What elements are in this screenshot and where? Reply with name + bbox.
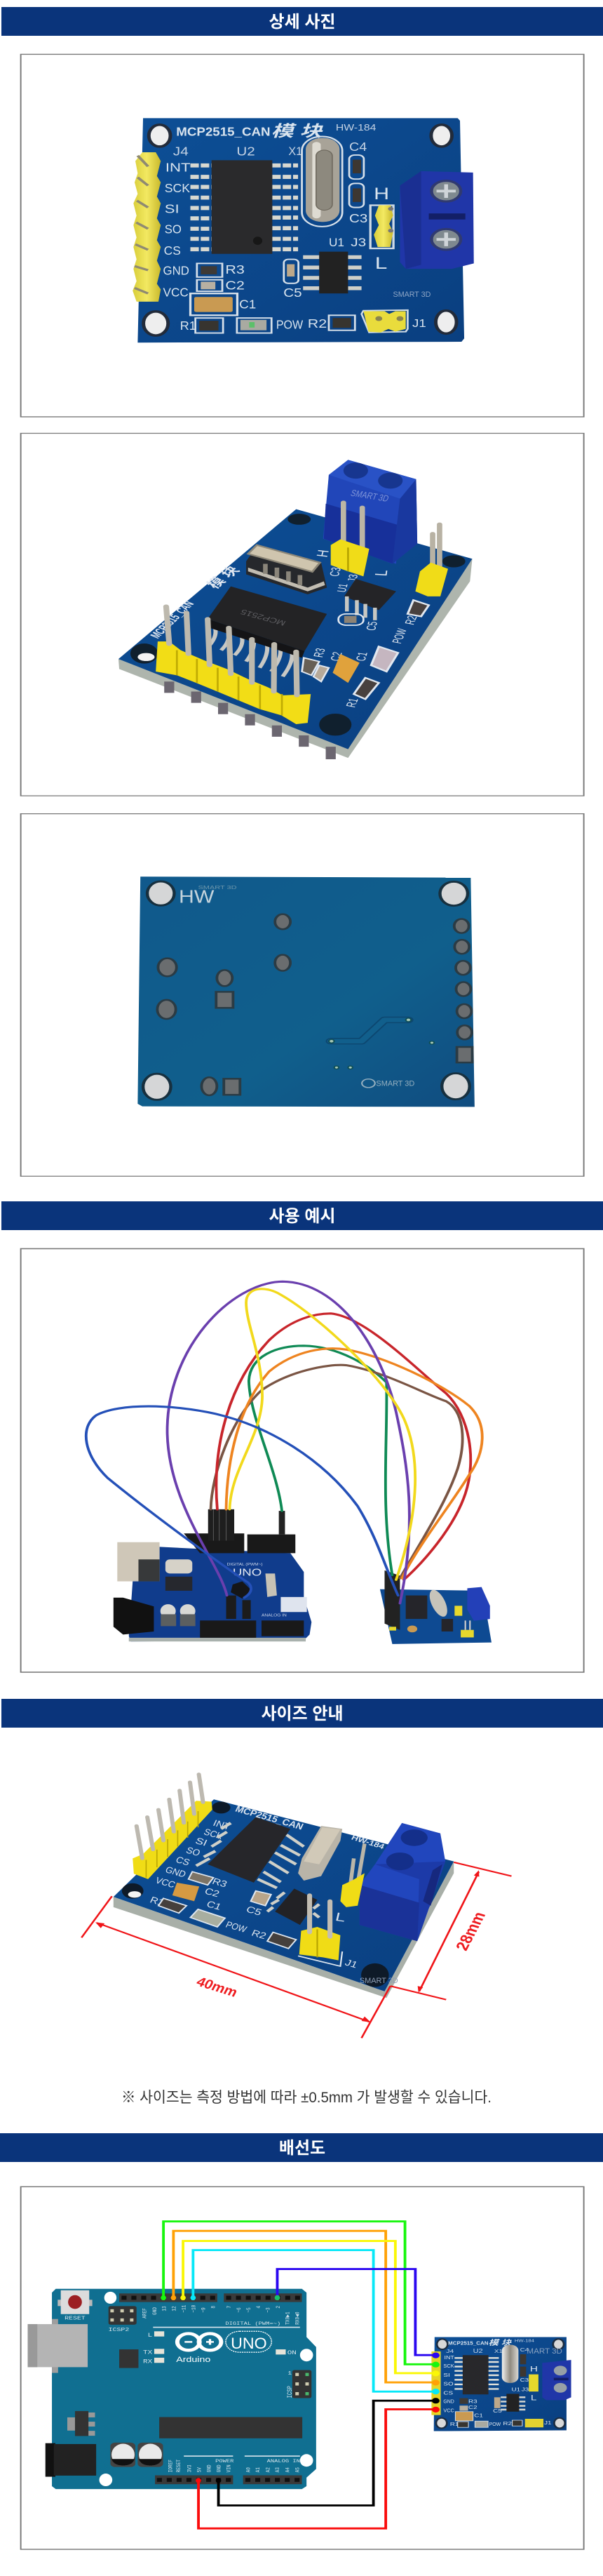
module silkscreen labels: MCP2515_CAN: [176, 126, 271, 138]
MCP2515 module image: MART 3D: [527, 2347, 562, 2355]
mounting holes: [130, 514, 466, 735]
angled silkscreen labels: R1: [148, 1895, 165, 1908]
circuit board top: [137, 118, 464, 342]
MCP2515 module image: GND: [443, 2398, 454, 2404]
HW and logo silkscreen: HW: [179, 887, 215, 907]
jumper J3 with pins: [331, 502, 370, 576]
solder joints: [157, 914, 473, 1095]
blue terminal: [360, 1823, 445, 1941]
module silkscreen labels: C5: [283, 286, 302, 300]
MCP2515 module image: CS: [443, 2390, 453, 2396]
power and analog labels: RESET: [177, 2459, 183, 2472]
pins under the board: [169, 681, 331, 759]
power and analog labels: VIN: [226, 2464, 233, 2472]
MCP2515 module image: C4: [520, 2347, 529, 2353]
crystal X1: [302, 137, 342, 227]
status LEDs: L: [148, 2332, 152, 2339]
jumper J1: [362, 310, 407, 333]
heading: 사용 예시: [1, 1201, 603, 1230]
digital pin labels: 12: [172, 2306, 178, 2311]
angled silkscreen labels: L: [334, 1910, 347, 1925]
angled silkscreen labels: R3: [210, 1876, 229, 1890]
jumper J1: [298, 1895, 342, 1966]
MCP2515 module image: [431, 2337, 571, 2431]
heading: 배선도: [0, 2133, 603, 2162]
MCP2515 module image: R1: [450, 2421, 459, 2427]
module silkscreen labels: R1: [180, 319, 196, 333]
yellow pin header J4: [133, 152, 161, 302]
Arduino UNO board photo: UNO: [233, 1566, 262, 1578]
status LEDs: TX: [143, 2349, 152, 2356]
angled silkscreen labels: SCK: [202, 1827, 224, 1841]
voltage regulator: [67, 2411, 95, 2436]
module silkscreen labels: INT: [165, 161, 191, 174]
angled silkscreen text: R3: [312, 648, 328, 658]
dimension label 40mm: 40mm: [194, 1974, 240, 2000]
heading: 사이즈 안내: [1, 1699, 603, 1728]
angled silkscreen labels: SO: [184, 1846, 202, 1858]
angled silkscreen labels: R2: [250, 1928, 268, 1942]
panel: wiring diagram: [21, 2187, 584, 2549]
power and analog labels: A4: [285, 2467, 292, 2472]
chip U2 with legs: [191, 160, 298, 254]
angled silkscreen labels: C2: [203, 1886, 221, 1900]
angled silkscreen text: H: [313, 549, 332, 558]
jumper wires: [86, 1281, 482, 1603]
board edge: [114, 1862, 454, 1998]
small chip: [119, 2349, 138, 2368]
Arduino logo: UNO: [231, 2335, 267, 2352]
module silkscreen labels: SO: [165, 223, 182, 236]
module silkscreen labels: SMART 3D: [393, 290, 431, 299]
Arduino UNO board photo: ANALOG IN: [262, 1614, 287, 1617]
digital pin labels: ~5: [246, 2307, 252, 2313]
chip U2 with bent legs: MCP2515: [238, 608, 287, 627]
angled silkscreen text: R2: [403, 615, 420, 626]
jumper J3 and capacitor: [340, 1843, 365, 1907]
power and analog labels: GND: [217, 2464, 223, 2472]
dimension label 28mm: 28mm: [452, 1910, 489, 1953]
heading: 사이즈 안내: 사이즈 안내: [261, 1704, 344, 1723]
module silkscreen labels: U2: [236, 144, 255, 159]
power and analog labels: A5: [295, 2467, 302, 2472]
module silkscreen labels: R2: [308, 317, 327, 331]
MCP2515 module image: VCC: [443, 2408, 454, 2413]
digital pin labels: ~3: [266, 2307, 272, 2313]
digital label and rule: DIGITAL (PWM=~): [225, 2322, 280, 2326]
power and analog labels: A2: [266, 2467, 272, 2472]
electrolytic capacitors: [110, 2443, 163, 2467]
MCP2515 module image: U2: [473, 2348, 483, 2354]
angled silkscreen text: U1: [336, 583, 351, 593]
USB port: [27, 2319, 88, 2373]
MCP2515 module image: SI: [443, 2372, 450, 2378]
module silkscreen labels: J1: [412, 318, 426, 330]
Arduino logo: Arduino: [176, 2356, 210, 2364]
back of circuit board: [137, 876, 475, 1107]
angled silkscreen labels: CS: [174, 1855, 191, 1868]
module silkscreen labels: POW: [276, 319, 303, 332]
reset button: [57, 2290, 93, 2321]
power and analog labels: POWER: [215, 2460, 234, 2464]
mounting holes: [122, 1802, 389, 1987]
power and analog labels: 3V3: [187, 2464, 194, 2472]
module silkscreen labels: C3: [349, 211, 367, 225]
jumper J1 with pins: [415, 524, 448, 596]
MCP2515 module image: J1: [544, 2420, 552, 2426]
power and analog labels: A1: [256, 2467, 262, 2472]
small parts: [302, 600, 429, 699]
MCP2515 module image: HW-184: [515, 2339, 534, 2343]
module silkscreen labels: H: [374, 185, 389, 203]
jumper connector housings: [208, 1509, 285, 1619]
ICSP2 header: [109, 2306, 137, 2333]
MCP2515 module image: POW: [489, 2421, 501, 2427]
board holes: [100, 2292, 313, 2486]
power and analog labels: A0: [246, 2467, 252, 2472]
MCP2515 module image: C2: [468, 2404, 477, 2410]
Arduino UNO board: [27, 2289, 316, 2489]
MCP2515 module image: C3: [520, 2377, 529, 2383]
MCP2515 module image: MCP2515_CAN: [448, 2340, 489, 2346]
HW and logo silkscreen: SMART 3D: [198, 885, 237, 890]
digital pin labels: [142, 2305, 302, 2325]
chip U1: [303, 252, 362, 293]
digital pin labels: RX0◀0: [295, 2311, 302, 2325]
panel: back side photo of module: [21, 814, 584, 1176]
HW and logo silkscreen: SMART 3D: [376, 1079, 414, 1088]
module silkscreen labels: C4: [349, 140, 367, 154]
angled silkscreen text: C2: [329, 651, 346, 662]
module silkscreen labels: C1: [239, 298, 256, 312]
blue terminal block: SMART 3D: [349, 488, 391, 504]
heading: 상세 사진: 상세 사진: [269, 13, 335, 32]
angled silkscreen labels: MCP2515_CAN: [233, 1804, 305, 1832]
power and analog labels: [168, 2455, 302, 2472]
angled silkscreen labels: C1: [205, 1900, 223, 1912]
circuit board: [114, 1799, 454, 1991]
chip U2: [196, 1817, 304, 1888]
angled silkscreen labels: C5: [244, 1904, 263, 1918]
mounting holes: [144, 125, 456, 335]
MCP2515 module image: C5: [493, 2408, 502, 2414]
MCP2515 module image: 模 块: [489, 2339, 513, 2347]
digital pin labels: 2: [276, 2306, 282, 2309]
module silkscreen labels: U1: [329, 236, 344, 249]
MCP2515 module image: H: [530, 2364, 538, 2373]
module silkscreen labels: HW-184: [336, 122, 376, 133]
module silkscreen labels: 模 块: [271, 122, 324, 140]
connection wires: [163, 2222, 435, 2528]
note about measurement tolerance: ※ 사이즈는 측정 방법에 따라 ±0.5mm 가 발생할 수 있습니다.: [121, 2089, 492, 2106]
small components: [158, 1871, 296, 1949]
Arduino UNO board photo: DIGITAL (PWM~): [227, 1563, 263, 1567]
module silkscreen labels: L: [375, 254, 387, 273]
status LEDs: ON: [287, 2349, 297, 2356]
angled silkscreen labels: GND: [163, 1865, 187, 1880]
MCP2515 module image: U1: [512, 2387, 520, 2392]
angled silkscreen labels: POW: [224, 1920, 248, 1935]
angled silkscreen text: C5: [365, 621, 381, 632]
power and analog pin headers: [155, 2476, 302, 2484]
module silkscreen labels: GND: [163, 265, 189, 277]
digital pin labels: 4: [256, 2306, 262, 2309]
crystal: [298, 1826, 342, 1881]
angled silkscreen labels: INT: [211, 1819, 232, 1832]
angled silkscreen text: L: [372, 569, 391, 577]
ICSP header right: [286, 2370, 311, 2398]
small surface components: [191, 260, 355, 333]
yellow pin header J4: [156, 606, 311, 724]
digital pin labels: ~10: [191, 2305, 198, 2313]
module silkscreen labels: R3: [225, 263, 245, 276]
dimension lines: [81, 1862, 512, 2038]
heading: 상세 사진: [1, 7, 603, 36]
MCP2515 module image: L: [531, 2393, 537, 2402]
HW and logo silkscreen: [179, 885, 414, 1088]
angled silkscreen labels: VCC: [154, 1876, 177, 1890]
Arduino logo: [176, 2331, 271, 2364]
angled silkscreen text: C1: [354, 651, 371, 662]
module silkscreen labels: VCC: [163, 286, 189, 300]
heading: 배선도: 배선도: [279, 2139, 325, 2158]
heading: 사용 예시: 사용 예시: [269, 1207, 335, 1226]
digital pin labels: GND: [153, 2307, 159, 2315]
module silkscreen labels: J3: [351, 236, 366, 249]
MCP2515 module small: [380, 1570, 492, 1644]
power and analog labels: 5V: [197, 2467, 203, 2472]
power and analog labels: A3: [276, 2467, 282, 2472]
panel: top view photo of module: [21, 54, 584, 417]
MCP2515 module image: J4: [446, 2348, 454, 2354]
dimension arrowheads: [95, 1870, 479, 2022]
chip U1: [267, 1888, 319, 1925]
chip U1: [344, 579, 396, 620]
power and analog labels: IOREF: [168, 2460, 175, 2472]
angled silkscreen labels: SMART 3D: [360, 1976, 398, 1985]
module silkscreen labels: CS: [164, 244, 181, 258]
ICSP2 header: ICSP2: [109, 2327, 129, 2333]
copper trace and vias: [329, 1018, 434, 1069]
panel: angled photo of module: [21, 433, 584, 796]
MCP2515 module image: INT: [445, 2354, 454, 2361]
angled silkscreen text: MCP2515_CAN: [147, 599, 197, 640]
digital pin labels: ~9: [201, 2307, 208, 2313]
module silkscreen labels: [163, 122, 431, 333]
main microcontroller: [159, 2417, 302, 2438]
board edge and underside: [118, 559, 473, 758]
power and analog labels: GND: [207, 2464, 213, 2472]
Arduino UNO board photo: [114, 1533, 311, 1641]
digital pin headers: [119, 2293, 302, 2302]
reset button: RESET: [65, 2316, 86, 2321]
chip U2 with bent legs: [205, 587, 327, 676]
status LEDs: [143, 2331, 297, 2365]
MCP2515 module image: SCK: [443, 2363, 454, 2369]
MCP2515 module image: J3: [522, 2387, 529, 2392]
angled silkscreen text: POW: [391, 627, 410, 645]
crystal: [246, 545, 327, 594]
angled silkscreen labels: [148, 1804, 398, 1985]
module silkscreen labels: J4: [173, 145, 189, 159]
blue screw terminal: [400, 171, 474, 269]
power and analog labels: ANALOG IN: [267, 2460, 300, 2464]
wire end dots: [161, 2295, 440, 2483]
angled silkscreen labels: HW-184: [350, 1834, 386, 1851]
MCP2515 module image: R3: [468, 2398, 477, 2404]
MCP2515 module image: R2: [503, 2420, 512, 2427]
digital pin labels: 13: [162, 2306, 168, 2311]
pin header: [133, 1774, 212, 1879]
module silkscreen labels: SI: [165, 203, 179, 216]
blue terminal block: [323, 460, 417, 563]
jumper J3: [370, 206, 393, 248]
status LEDs: RX: [143, 2358, 152, 2365]
module silkscreen labels: X1: [288, 145, 302, 158]
ICSP header right: ICSP: [286, 2386, 294, 2398]
digital pin labels: TX0▶1: [285, 2311, 292, 2325]
module silkscreen labels: C2: [225, 279, 245, 292]
angled silkscreen text: C3: [328, 566, 344, 578]
angled silkscreen text: 模 块: [204, 564, 243, 591]
digital pin labels: ~6: [236, 2307, 243, 2313]
digital pin labels: 8: [211, 2306, 217, 2309]
angled silkscreen labels: SI: [194, 1836, 209, 1848]
panel: size guide photo with dimensions: [81, 1774, 512, 2038]
angled silkscreen text: R1: [344, 698, 361, 709]
panel: usage example photo: [21, 1248, 584, 1672]
angled silkscreen labels: J1: [343, 1958, 359, 1970]
MCP2515 module image: C1: [474, 2413, 483, 2418]
mounting holes: [143, 881, 470, 1100]
angled silkscreen text: J3: [346, 573, 361, 583]
capacitors C4 C3: [349, 155, 364, 208]
digital pin labels: ~11: [182, 2305, 188, 2313]
angled silkscreen text: [147, 549, 420, 709]
digital pin labels: AREF: [142, 2308, 149, 2318]
power jack: [46, 2443, 96, 2477]
MCP2515 module image: SO: [443, 2381, 454, 2387]
ICSP header right: 1: [287, 2370, 292, 2377]
circuit board: [118, 509, 473, 749]
MCP2515 module image: X1: [494, 2348, 503, 2354]
digital pin labels: 7: [226, 2306, 233, 2309]
module silkscreen labels: SCK: [165, 182, 190, 195]
